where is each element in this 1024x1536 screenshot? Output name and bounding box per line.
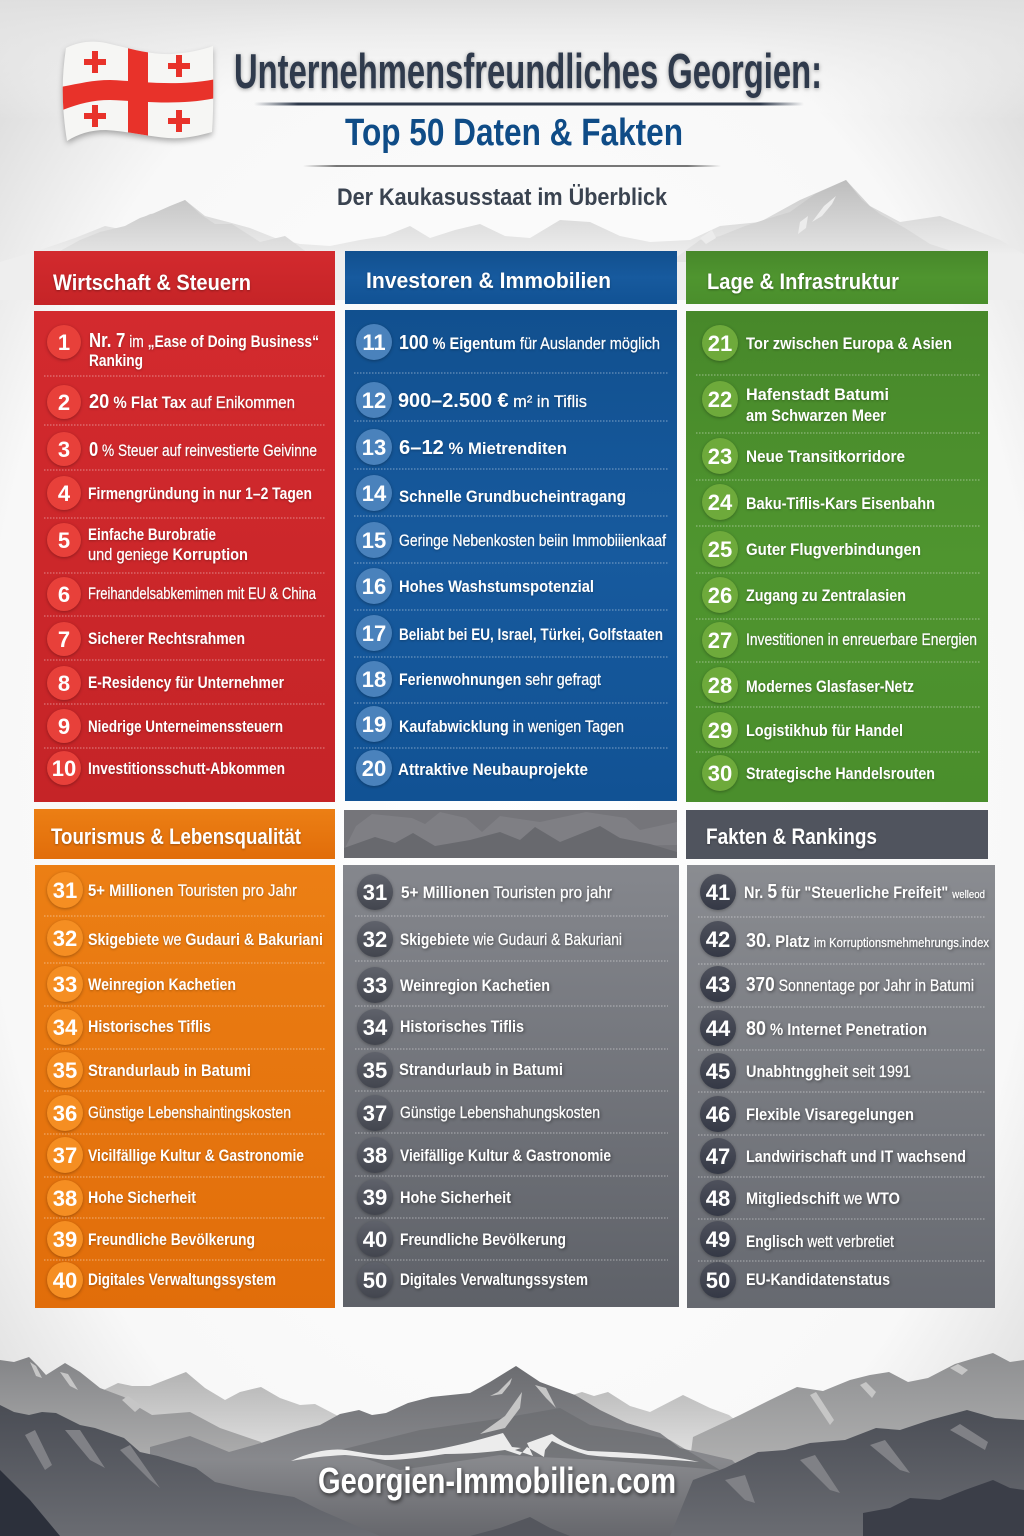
item 40 [47,1262,276,1298]
item 22: Hafenstadt Batumi [746,386,889,404]
item 33: 33 [53,972,77,997]
item 20: 20 [362,756,386,781]
item 34: Historisches Tiflis [400,1018,524,1036]
item 10: 10 [52,756,76,781]
item 44 [698,1010,986,1050]
item 27: Investitionen in enreuerbare Energien [746,631,977,649]
item 50: Digitales Verwaltungssystem [400,1271,588,1289]
item 36: Günstige Lebenshaintingskosten [88,1104,291,1122]
item 7: Sicherer Rechtsrahmen [88,630,245,648]
item 39: 39 [363,1185,387,1210]
item 41: 41 [706,880,730,905]
item 33 [355,967,668,1006]
item 24 [696,484,980,526]
item 38: 38 [53,1186,77,1211]
item 32 [44,920,326,963]
panel header: Wirtschaft & Steuern [34,251,335,305]
item 26 [696,577,980,619]
item 28 [696,667,980,707]
item 31: 31 [53,878,77,903]
item 35 [44,1052,326,1091]
item 39: Freundliche Bevölkerung [88,1231,255,1249]
item 35: 35 [363,1058,387,1083]
item 12: 12 [362,388,386,413]
item 6 [44,577,326,616]
item 2 [44,385,326,425]
item 47 [698,1138,986,1177]
item 31: 5+ Millionen Touristen pro jahr [401,884,612,902]
item 33: Weinregion Kachetien [88,976,236,994]
item 19 [354,706,668,748]
item 1: 1 [58,330,70,355]
item 31: 31 [363,880,387,905]
item 13 [354,429,668,469]
item 38: Vieifällige Kultur & Gastronomie [400,1147,611,1165]
item 47: 47 [706,1144,730,1169]
panel header: Lage & Infrastruktur: Lage & Infrastruktur [707,269,899,294]
item 8 [44,666,326,704]
item 34: Historisches Tiflis [88,1018,211,1036]
panel header: Investoren & Immobilien: Investoren & Immobilien [366,268,611,293]
subtitle: Top 50 Daten & Fakten [345,112,683,154]
item 45: Unabhtnggheit seit 1991 [746,1063,911,1081]
tagline: Der Kaukasusstaat im Überblick [337,184,668,211]
item 48: 48 [706,1186,730,1211]
item 1: Ranking [89,352,143,370]
item 38 [44,1180,326,1218]
item 31 [355,874,668,916]
item 39: Hohe Sicherheit [400,1189,511,1207]
item 9: Niedrige Unterneimenssteuern [88,718,283,736]
item 35: 35 [53,1058,77,1083]
item 23: Neue Transitkorridore [746,448,905,466]
item 10 [47,751,285,785]
item 50 [357,1262,588,1298]
item 18 [354,661,668,703]
item 1 [44,325,326,376]
item 18: 18 [362,667,386,692]
item 3 [44,432,326,470]
item 5 [44,523,326,573]
subtitle rule [303,165,721,167]
item 6: Freihandelsabkemimen mit EU & China [88,585,317,603]
item 11: 11 [362,330,386,355]
item 15: 15 [362,528,386,553]
panel header: Fakten & Rankings: Fakten & Rankings [706,824,877,849]
item 26: 26 [708,583,732,608]
item 21: 21 [708,331,732,356]
item 39 [44,1221,326,1260]
item 25: 25 [708,537,732,562]
item 43: 370 Sonnentage por Jahr in Batumi [746,974,974,996]
item 42: 42 [706,927,730,952]
item 29: 29 [708,718,732,743]
item 48: Mitgliedschift we WTO [746,1190,900,1208]
item 35: Strandurlaub in Batumi [88,1062,251,1080]
item 27: 27 [708,628,732,653]
panel: Fakten & Rankings [687,865,995,1308]
item 37: Vicilfällige Kultur & Gastronomie [88,1147,304,1165]
item 3: 3 [58,437,70,462]
item 26: Zugang zu Zentralasien [746,587,906,605]
item 2: 20 % Flat Tax auf Enikommen [89,391,295,413]
item 46: 46 [706,1102,730,1127]
panel header: Tourismus & Lebensqualität: Tourismus & Lebensqualität [51,824,302,849]
item 37: Günstige Lebenshahungskosten [400,1104,600,1122]
item 24: 24 [708,490,733,515]
panel header: Investoren & Immobilien [345,251,677,304]
item 6: 6 [58,582,70,607]
icon: logo mountain swoosh [291,1433,699,1462]
item 47: Landwirischaft und IT wachsend [746,1148,966,1166]
icon: Georgian flag [60,38,216,142]
item 39 [355,1179,668,1218]
item 40: Freundliche Bevölkerung [400,1231,566,1249]
panel: Lage & Infrastruktur [686,311,988,802]
item 50: 50 [706,1268,730,1293]
item 35: Strandurlaub in Batumi [399,1061,563,1079]
item 33: Weinregion Kachetien [400,977,550,995]
panel header: mountain band [344,810,677,858]
item 22: 22 [708,387,732,412]
item 23: 23 [708,444,732,469]
background mountains top [0,180,1024,300]
item 46 [698,1096,986,1135]
item 17 [354,615,668,657]
item 11: 100 % Eigentum für Auslander möglich [399,332,660,354]
panel: Tourismus (grau) [343,865,679,1307]
item 17: 17 [362,621,386,646]
item 21: Tor zwischen Europa & Asien [746,335,952,353]
item 9 [44,709,326,748]
item 30 [702,755,935,791]
item 43 [698,966,986,1007]
item 49 [698,1221,986,1261]
item 29 [696,712,980,752]
item 32: Skigebiete we Gudauri & Bakuriani [88,931,323,949]
item 45 [698,1053,986,1092]
item 42: 30. Platz im Korruptionsmehmehrungs.index [746,930,990,952]
item 15 [354,522,668,563]
item 50: EU-Kandidatenstatus [746,1271,890,1289]
item 36 [44,1095,326,1134]
item 13: 6–12 % Mietrenditen [399,437,567,459]
panel header: Wirtschaft & Steuern: Wirtschaft & Steuern [53,270,251,295]
item 12 [354,382,668,421]
item 7 [44,622,326,660]
item 12: 900–2.500 € m² in Tiflis [398,390,587,412]
item 32: 32 [53,926,77,951]
item 32: Skigebiete wie Gudauri & Bakuriani [400,931,622,949]
item 38: Hohe Sicherheit [88,1189,196,1207]
item 32: 32 [363,927,387,952]
item 28: 28 [708,673,732,698]
item 19: Kaufabwicklung in wenigen Tagen [399,718,624,736]
item 15: Geringe Nebenkosten beiin Immobiiienkaaf [399,532,666,550]
item 19: 19 [362,712,386,737]
item 8: E-Residency für Unternehmer [88,674,284,692]
item 4: 4 [58,481,71,506]
bottom mountain range [0,1353,1024,1536]
panel: Tourismus & Lebensqualität [35,865,335,1308]
item 49: Englisch wett verbretiet [746,1233,894,1251]
panel header: Tourismus & Lebensqualität [34,809,335,859]
item 35 [355,1052,668,1091]
panel header: Fakten & Rankings [686,810,988,859]
item 2: 2 [58,390,70,415]
item 17: Beliabt bei EU, Israel, Türkei, Golfstaaten [399,626,663,644]
item 40: 40 [53,1268,77,1293]
footer brand: Georgien-Immobilien.com [318,1460,676,1501]
item 33: 33 [363,973,387,998]
item 25 [696,531,980,573]
item 27 [696,622,980,662]
item 23 [696,438,980,480]
item 34: 34 [53,1015,78,1040]
item 31: 5+ Millionen Touristen pro Jahr [88,882,297,900]
item 39: 39 [53,1227,77,1252]
item 14 [354,475,668,516]
item 37 [44,1137,326,1177]
item 3: 0 % Steuer auf reinvestierte Geivinne [89,439,317,461]
item 50: 50 [363,1268,387,1293]
item 18: Ferienwohnungen sehr gefragt [399,671,601,689]
item 1: Nr. 7 im „Ease of Doing Business“ [89,330,319,352]
item 38: 38 [363,1143,387,1168]
item 38 [355,1137,668,1176]
item 40 [355,1221,668,1260]
item 4 [44,476,326,518]
item 21 [696,325,980,375]
item 20 [356,750,588,786]
panel: Wirtschaft & Steuern [34,311,335,802]
item 37 [355,1095,668,1133]
item 34 [44,1009,326,1049]
item 36: 36 [53,1101,77,1126]
item 34 [355,1009,668,1049]
item 16 [354,568,668,610]
item 30: Strategische Handelsrouten [746,765,935,783]
item 29: Logistikhub für Handel [746,722,903,740]
item 16: Hohes Washstumspotenzial [399,578,594,596]
item 41 [698,874,986,917]
item 45: 45 [706,1059,730,1084]
item 20: Attraktive Neubauprojekte [398,761,588,779]
item 7: 7 [58,627,70,652]
item 13: 13 [362,435,386,460]
item 49: 49 [706,1227,730,1252]
item 22 [696,381,980,433]
item 40: 40 [363,1227,387,1252]
item 5: Einfache Burobratie [88,526,216,544]
item 33 [44,966,326,1006]
item 8: 8 [58,671,70,696]
item 42 [698,921,990,964]
item 14: 14 [362,481,387,506]
item 44: 80 % Internet Penetration [746,1018,927,1040]
item 37: 37 [53,1143,77,1168]
item 32 [355,921,668,961]
item 5: und geniege Korruption [88,546,248,564]
item 40: Digitales Verwaltungssystem [88,1271,276,1289]
panel header: Lage & Infrastruktur [686,251,988,304]
item 16: 16 [362,574,386,599]
item 25: Guter Flugverbindungen [746,541,921,559]
item 9: 9 [58,714,70,739]
item 41: Nr. 5 für "Steuerliche Freifeit" welleod [744,881,985,903]
item 37: 37 [363,1101,387,1126]
item 5: 5 [58,528,70,553]
item 46: Flexible Visaregelungen [746,1106,914,1124]
item 48 [698,1180,986,1219]
item 22: am Schwarzen Meer [746,407,887,425]
item 30: 30 [708,761,732,786]
item 44: 44 [706,1016,731,1041]
item 28: Modernes Glasfaser-Netz [746,678,914,696]
item 34: 34 [363,1015,388,1040]
item 31 [44,872,326,916]
item 11 [354,324,668,373]
item 24: Baku-Tiflis-Kars Eisenbahn [746,495,935,513]
item 10: Investitionsschutt-Abkommen [88,760,285,778]
item 14: Schnelle Grundbucheintragang [399,488,626,506]
item 43: 43 [706,972,730,997]
title underline [254,102,804,106]
item 50 [700,1262,890,1298]
item 4: Firmengründung in nur 1–2 Tagen [88,485,312,503]
panel: Investoren & Immobilien [345,310,677,801]
